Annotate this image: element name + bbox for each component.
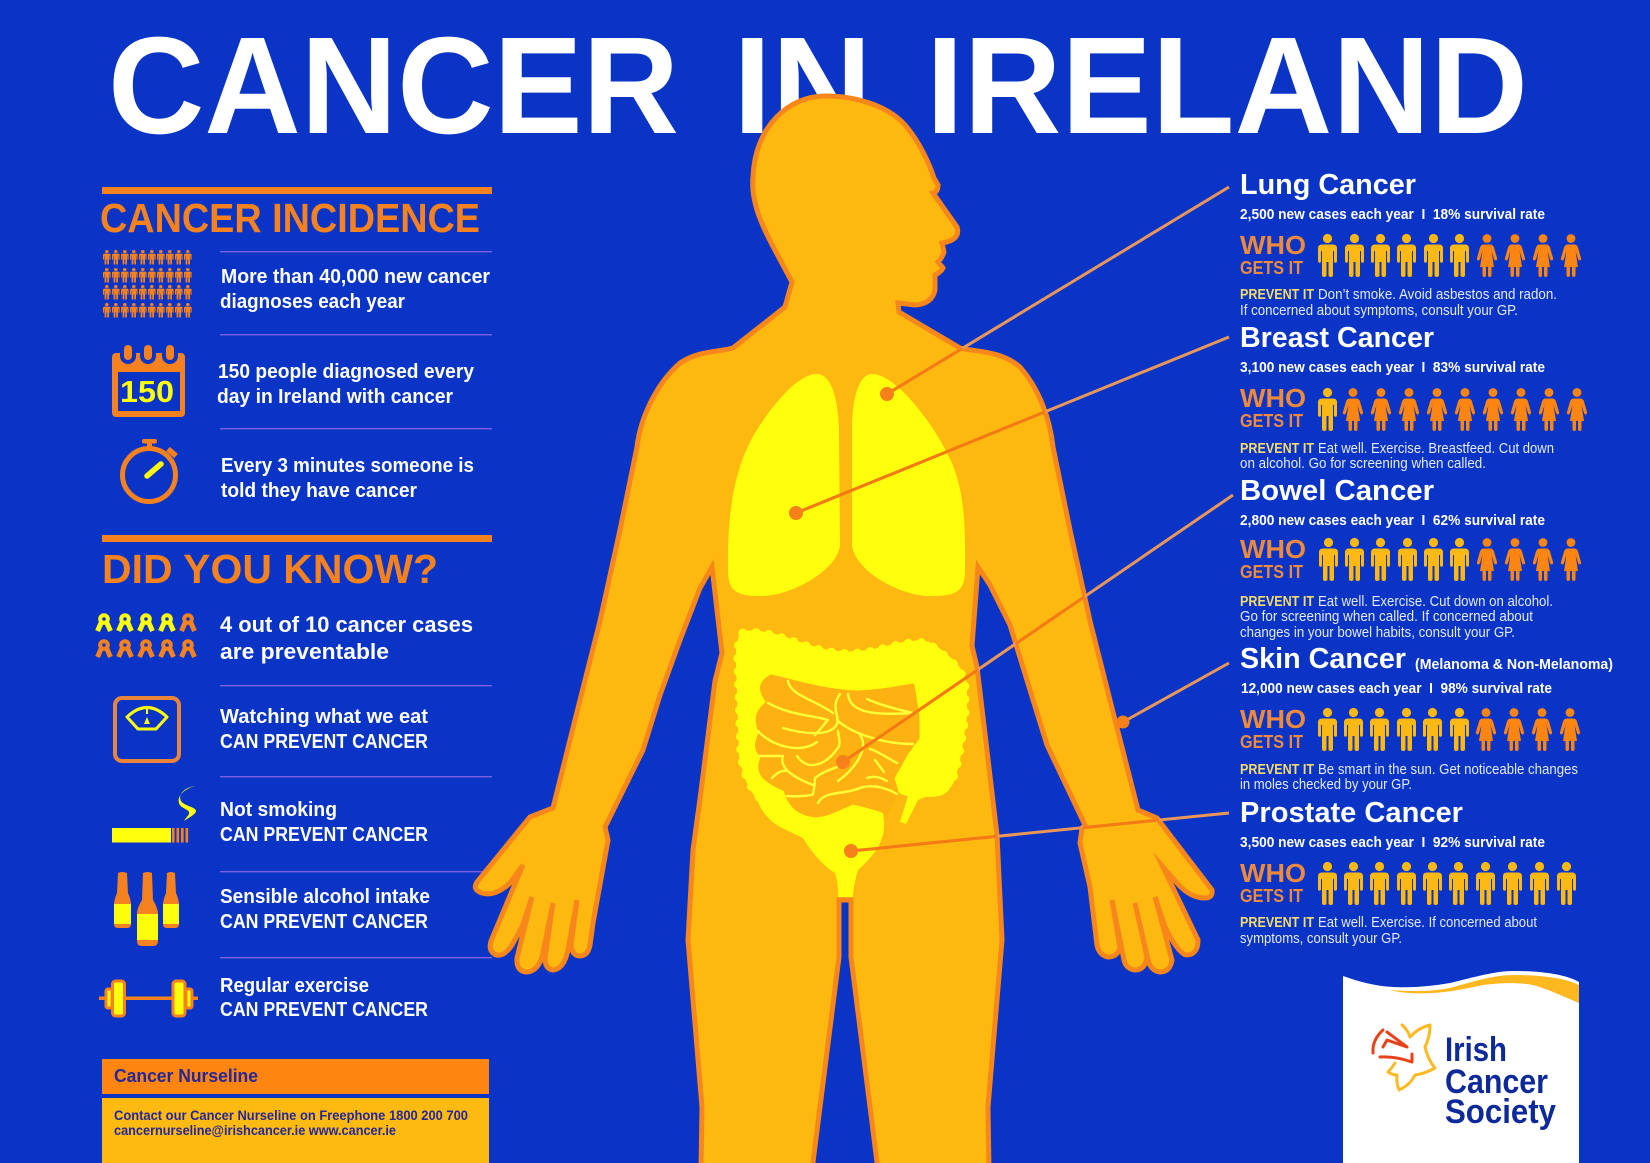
pointer lines inside body [802,348,1160,852]
stats: breast cancer: 3,100 new cases each year I 83% survival rate [1240,360,1545,376]
who gets it: lung cancer: GETS IT [1240,257,1304,278]
prevent it: skin cancer [1240,762,1578,793]
panel: breast cancer [1240,322,1587,472]
stats: bowel cancer: 2,800 new cases each year I 62% survival rate [1240,513,1545,529]
text: 150 people: 150 people diagnosed every [218,360,475,383]
who gets it: prostate cancer: WHO [1240,860,1306,888]
logo: irish cancer society: Irish [1445,1031,1507,1069]
body silhouette [475,96,1212,1163]
who gets it: prostate cancer [1240,860,1576,906]
text: sensible alcohol [220,886,430,933]
pointer lines outside body [796,187,1233,851]
prevent it: skin cancer: Be smart in the sun. Get noticeable changes [1318,762,1578,778]
prevent it: skin cancer: in moles checked by your GP. [1240,777,1412,793]
text: not smoking: CAN PREVENT CANCER [220,824,428,846]
heading: breast cancer: Breast Cancer [1240,322,1434,354]
prevent it: breast cancer: PREVENT IT [1240,441,1314,457]
prevent it: bowel cancer [1240,594,1553,641]
prevent it: bowel cancer: Go for screening when called. If concerned about [1240,609,1533,625]
panel: skin cancer [1240,643,1613,793]
stats: lung cancer: 2,500 new cases each year I 18% survival rate [1240,207,1545,223]
prevent it: lung cancer: PREVENT IT [1240,287,1314,303]
small intestine [756,676,918,816]
who gets it: skin cancer [1240,706,1580,752]
icon: ribbons [98,615,194,657]
text: not smoking [220,799,428,846]
heading: bowel cancer: Bowel Cancer [1240,475,1434,507]
lungs [728,374,965,596]
who gets it: lung cancer [1240,232,1581,278]
prevent it: prostate cancer: Eat well. Exercise. If concerned about [1318,915,1537,931]
panel: cancer nurseline: cancernurseline@irishcancer.ie www.cancer.ie [114,1123,396,1138]
panel: lung cancer [1240,169,1581,319]
prevent it: skin cancer: PREVENT IT [1240,762,1314,778]
text: 150 people [217,360,475,408]
icon: cigarette [112,786,196,842]
panel: cancer nurseline: Cancer Nurseline [114,1065,258,1086]
icon: people grid [103,250,192,318]
prevent it: breast cancer: Eat well. Exercise. Breastfeed. Cut down [1318,441,1554,457]
text: 40,000 diagnoses [220,265,490,313]
prevent it: breast cancer [1240,441,1554,472]
who gets it: breast cancer [1240,385,1587,431]
prevent it: bowel cancer: PREVENT IT [1240,594,1314,610]
stats: skin cancer: 12,000 new cases each year I 98% survival rate [1241,681,1552,697]
who gets it: breast cancer: GETS IT [1240,410,1304,431]
prevent it: lung cancer [1240,287,1557,319]
panel: prostate cancer [1240,797,1576,947]
prevent it: lung cancer: Don’t smoke. Avoid asbestos and radon. [1318,287,1557,303]
who gets it: bowel cancer [1240,536,1581,582]
text: watching what we eat: CAN PREVENT CANCER [220,731,428,753]
heading: did you know: DID YOU KNOW? [102,546,438,592]
subheading: melanoma: (Melanoma & Non-Melanoma) [1415,657,1613,673]
who gets it: prostate cancer: GETS IT [1240,885,1304,906]
icon: daffodil [1373,1025,1435,1090]
who gets it: lung cancer: WHO [1240,232,1306,260]
body figure [475,96,1212,1163]
pointer dots [789,387,1130,858]
text: watching what we eat: Watching what we eat [220,706,428,728]
text: watching what we eat [220,706,428,753]
text: preventable: are preventable [220,639,389,664]
who gets it: breast cancer: WHO [1240,385,1306,413]
icon: calendar [112,344,185,417]
large intestine [736,631,967,897]
text: every 3 minutes: Every 3 minutes someone is [221,454,474,477]
text: 40,000 diagnoses: More than 40,000 new cancer [221,265,490,288]
text: 150 people: day in Ireland with cancer [217,385,453,408]
logo: irish cancer society: Cancer [1445,1063,1548,1101]
stats: prostate cancer: 3,500 new cases each year I 92% survival rate [1240,835,1545,851]
heading: prostate cancer: Prostate Cancer [1240,797,1463,829]
icon: bottles [114,872,179,946]
prevent it: prostate cancer [1240,915,1537,947]
prevent it: lung cancer: If concerned about symptoms, consult your GP. [1240,303,1518,319]
who gets it: skin cancer: WHO [1240,706,1306,734]
icon: weighing scale [115,698,179,761]
text: regular exercise [220,975,428,1021]
panel: cancer nurseline [102,1059,489,1163]
text: regular exercise: Regular exercise [220,975,369,997]
heading: lung cancer: Lung Cancer [1240,169,1416,201]
text: sensible alcohol: Sensible alcohol intake [220,886,430,908]
heading: cancer incidence: CANCER INCIDENCE [100,195,480,241]
text: preventable: 4 out of 10 cancer cases [220,612,473,637]
icon: dumbbell [99,981,198,1016]
heading: skin cancer: Skin Cancer [1240,643,1406,675]
text: not smoking: Not smoking [220,799,337,821]
icon: stopwatch [122,439,176,502]
prevent it: bowel cancer: Eat well. Exercise. Cut down on alcohol. [1318,594,1553,610]
title: IN [733,9,872,163]
logo: irish cancer society [1343,971,1579,1163]
panel: did you know [98,535,492,1021]
who gets it: bowel cancer: GETS IT [1240,561,1304,582]
logo: irish cancer society: Society [1445,1093,1556,1131]
who gets it: skin cancer: GETS IT [1240,731,1304,752]
prevent it: breast cancer: on alcohol. Go for screening when called. [1240,456,1486,472]
title: CANCER [108,9,679,163]
panel: cancer nurseline: Contact our Cancer Nurseline on Freephone 1800 200 700 [114,1108,468,1123]
text: every 3 minutes: told they have cancer [221,479,417,502]
text: preventable [220,612,473,664]
title [108,9,1528,163]
who gets it: bowel cancer: WHO [1240,536,1306,564]
prevent it: prostate cancer: PREVENT IT [1240,915,1314,931]
title: IRELAND [926,9,1528,163]
panel: bowel cancer [1240,475,1581,641]
text: regular exercise: CAN PREVENT CANCER [220,999,428,1021]
panel: cancer incidence [100,187,492,502]
prevent it: prostate cancer: symptoms, consult your GP. [1240,931,1402,947]
text: sensible alcohol: CAN PREVENT CANCER [220,911,428,933]
prevent it: bowel cancer: changes in your bowel habits, consult your GP. [1240,625,1515,641]
icon: calendar: 150 [120,374,174,409]
text: every 3 minutes [221,454,474,502]
text: 40,000 diagnoses: diagnoses each year [220,290,405,313]
